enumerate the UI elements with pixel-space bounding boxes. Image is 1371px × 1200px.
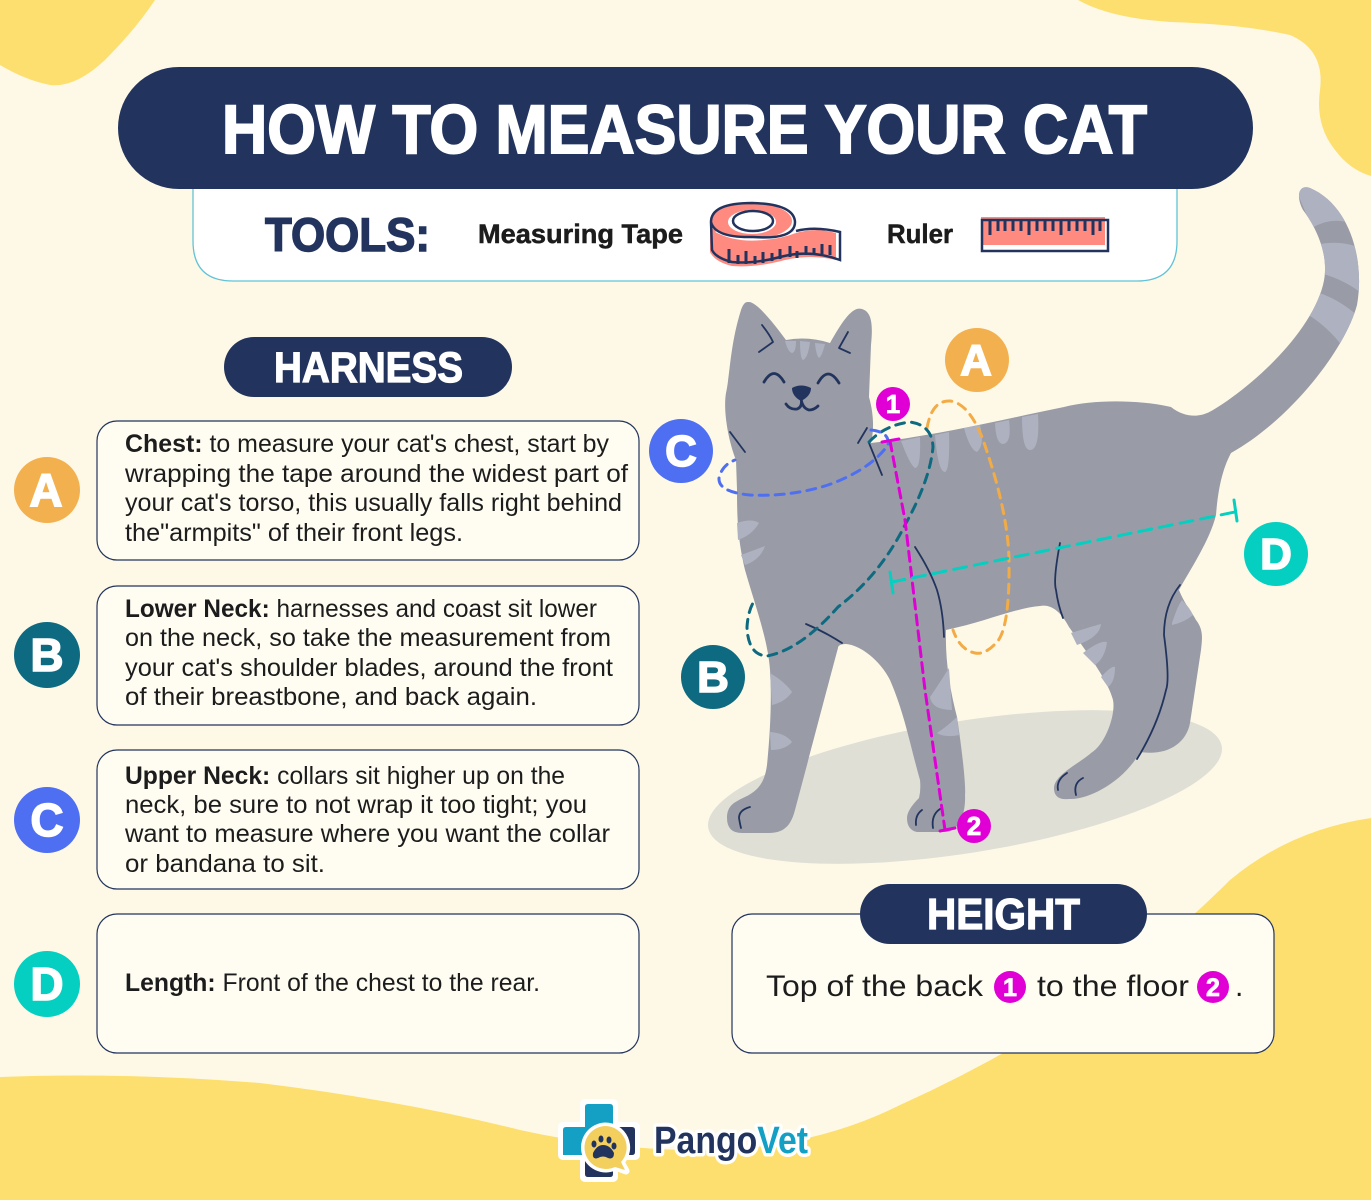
title banner (118, 67, 1253, 189)
length card (97, 914, 639, 1053)
floor shadow (698, 681, 1232, 893)
upper neck text: or bandana to sit. (125, 850, 325, 878)
lower neck card (97, 586, 639, 725)
height marker 2: 2 (1206, 974, 1220, 1002)
lower neck text (125, 595, 613, 711)
head stripes (785, 341, 825, 360)
height marker 1: 1 (1003, 974, 1017, 1002)
length ticks (890, 500, 1237, 593)
harness heading (224, 337, 512, 397)
height text start: Top of the back (766, 970, 984, 1003)
cat badge C: C (665, 427, 697, 476)
title: HOW TO MEASURE YOUR CAT (222, 91, 1147, 168)
cat badge B (681, 645, 745, 709)
badge A: A (29, 464, 63, 516)
cat badge B: B (697, 653, 729, 702)
panel: length (14, 914, 639, 1053)
chest text (124, 430, 628, 547)
measurement: length line (892, 512, 1235, 582)
lower neck text: of their breastbone, and back again. (125, 683, 537, 711)
height marker 1 (994, 971, 1026, 1003)
panel: upper neck (14, 750, 639, 889)
cat badge A (945, 328, 1009, 392)
lower neck text: your cat's shoulder blades, around the front (125, 654, 613, 682)
lower neck text: Lower Neck: harnesses and coast sit lower (125, 595, 597, 623)
logo wordmark: PangoVet (654, 1120, 808, 1162)
cat badge D: D (1260, 530, 1292, 579)
cat face (759, 325, 850, 410)
cat body (725, 187, 1359, 833)
tools panel background (193, 180, 1177, 281)
marker 2: 2 (967, 811, 981, 841)
upper neck text (124, 762, 610, 878)
height ticks (882, 439, 955, 831)
illustration: cat (725, 175, 1370, 833)
height card (732, 914, 1274, 1053)
badge C: C (30, 794, 64, 846)
banner background (118, 67, 1253, 189)
measuring tape label: Measuring Tape (478, 219, 683, 249)
badge B: B (30, 629, 64, 681)
chest card (97, 421, 639, 560)
chest text: the"armpits" of their front legs. (125, 519, 463, 547)
badge D: D (30, 958, 64, 1010)
panel: chest (14, 421, 639, 560)
logo mark (563, 1104, 635, 1177)
measurement: lower neck loop (747, 422, 933, 656)
height heading: HEIGHT (927, 890, 1080, 939)
upper neck text: Upper Neck: collars sit higher up on the (125, 762, 565, 790)
badge D (14, 951, 80, 1017)
badge B (14, 622, 80, 688)
height text middle: to the floor (1037, 970, 1189, 1003)
marker 1 (876, 387, 910, 421)
marker 1: 1 (886, 389, 900, 419)
tail stripes (1299, 187, 1360, 343)
measurement: upper neck loop (719, 430, 888, 495)
measurement: chest loop (927, 401, 1009, 653)
icon: measuring tape (710, 203, 840, 266)
ruler label: Ruler (887, 219, 953, 249)
badge C (14, 787, 80, 853)
blob: top right (1078, 0, 1371, 176)
marker 2 (957, 809, 991, 843)
panel: height (732, 884, 1274, 1053)
lower neck text: on the neck, so take the measurement from (125, 624, 611, 652)
height heading (860, 884, 1147, 944)
harness heading: HARNESS (274, 344, 463, 392)
upper neck card (97, 750, 639, 889)
logo: PangoVet (563, 1104, 808, 1177)
tools panel (193, 180, 1177, 281)
badge A (14, 457, 80, 523)
cat badge A: A (960, 336, 992, 385)
icon: ruler (981, 217, 1108, 251)
panel: lower neck (14, 586, 639, 725)
cat badge C (649, 419, 713, 483)
upper neck text: neck, be sure to not wrap it too tight; you (125, 791, 587, 819)
cat contour lines (730, 428, 1180, 828)
blob: bottom (0, 818, 1371, 1200)
cat badge D (1244, 522, 1308, 586)
measurement: height line (890, 441, 945, 830)
upper neck text: want to measure where you want the collar (124, 820, 610, 848)
height marker 2 (1197, 971, 1229, 1003)
leg and chest stripes (737, 520, 1193, 750)
chest text: Chest: to measure your cat's chest, start by (125, 430, 609, 458)
tools label: TOOLS: (265, 208, 430, 261)
height text end: . (1235, 970, 1243, 1003)
length text: Length: Front of the chest to the rear. (125, 969, 540, 997)
blob: top left (0, 0, 155, 85)
chest text: wrapping the tape around the widest part of (124, 460, 628, 488)
chest text: your cat's torso, this usually falls right behind (125, 489, 622, 517)
back stripes (901, 414, 1038, 472)
